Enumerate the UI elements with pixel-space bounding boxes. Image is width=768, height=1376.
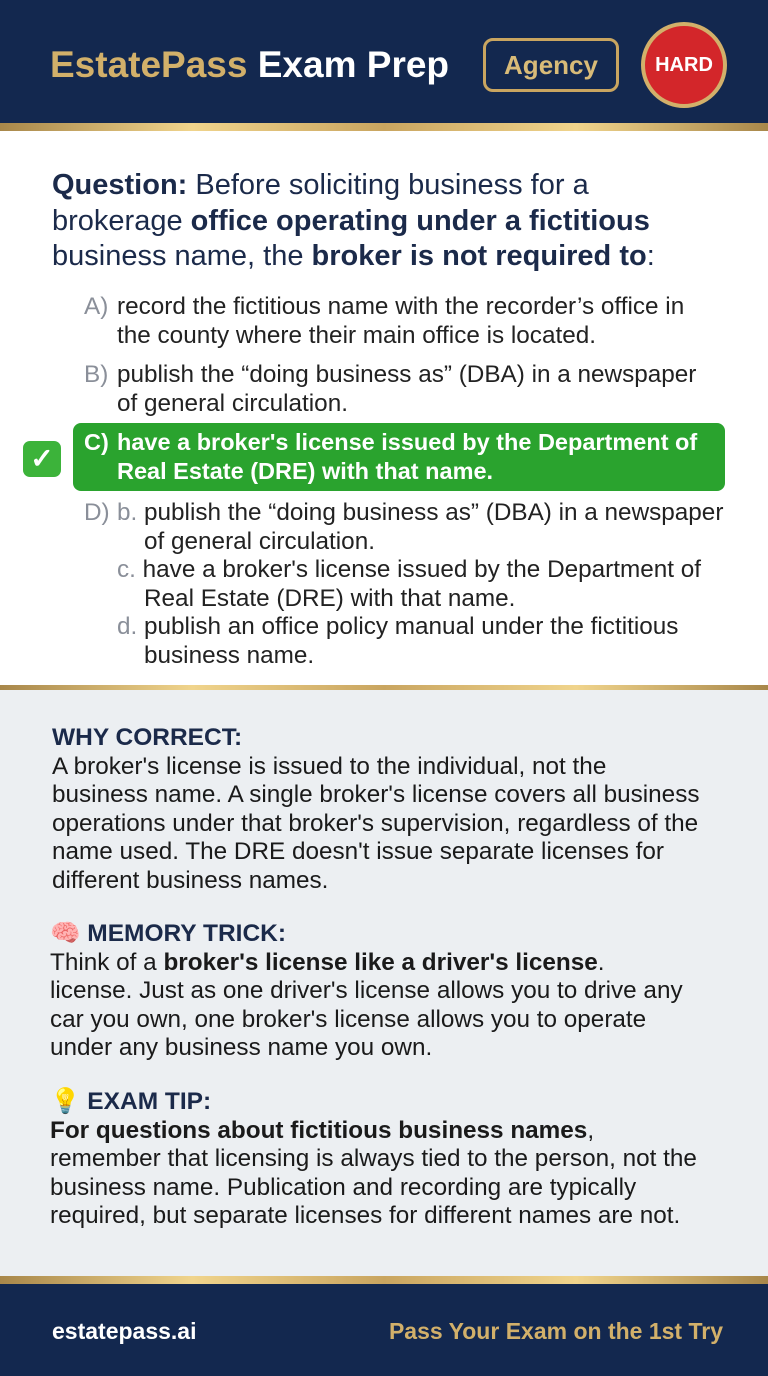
- option A: A): [84, 293, 108, 320]
- why correct: operations under that broker's supervision, regardless of the: [52, 810, 698, 836]
- option A: [84, 293, 684, 348]
- option A: record the fictitious name with the recorder’s office in: [117, 293, 684, 320]
- question: business name, the broker is not required to:: [52, 240, 655, 272]
- header: [0, 0, 768, 123]
- option D: D): [84, 499, 110, 526]
- exam tip: For questions about fictitious business names,: [50, 1116, 594, 1144]
- question: Question: Before soliciting business for a: [52, 169, 589, 201]
- option B: publish the “doing business as” (DBA) in a newspaper: [117, 361, 696, 388]
- exam tip: 💡 EXAM TIP:: [50, 1088, 211, 1115]
- exam tip: business name. Publication and recording are typically: [50, 1174, 636, 1200]
- option B: B): [84, 361, 108, 388]
- text: c. have a broker's license issued by the Department of: [117, 556, 701, 583]
- badge: HARD: [641, 22, 727, 108]
- why correct: different business names.: [52, 866, 328, 894]
- footer tagline: Pass Your Exam on the 1st Try: [389, 1318, 723, 1344]
- question: brokerage office operating under a fictitious: [52, 204, 650, 236]
- memory trick: Think of a broker's license like a driver's license.: [50, 948, 605, 976]
- exam tip: required, but separate licenses for different names are not.: [50, 1202, 680, 1229]
- badge: HARD: HARD: [655, 54, 713, 76]
- footer url: estatepass.ai: [52, 1318, 196, 1344]
- title: EstatePass Exam Prep: [50, 44, 449, 85]
- icon: check: ✓: [30, 443, 54, 474]
- option D: [84, 499, 724, 668]
- option C correct: C): [84, 429, 109, 455]
- option C correct: Real Estate (DRE) with that name.: [117, 458, 493, 484]
- memory trick: under any business name you own.: [50, 1034, 432, 1061]
- badge: Agency: [483, 38, 619, 92]
- option D: b. publish the “doing business as” (DBA) in a newspaper: [117, 499, 723, 526]
- footer: [0, 1284, 768, 1376]
- exam tip: [50, 1087, 697, 1229]
- question: [52, 169, 655, 272]
- option C correct: [73, 423, 725, 491]
- icon: check: [23, 441, 61, 477]
- memory trick: 🧠 MEMORY TRICK:: [50, 920, 286, 947]
- exam tip: remember that licensing is always tied to the person, not the: [50, 1145, 697, 1172]
- why correct: [52, 724, 700, 894]
- why correct: business name. A single broker's license covers all business: [52, 781, 700, 808]
- memory trick: car you own, one broker's license allows you to operate: [50, 1006, 646, 1032]
- text: of general circulation.: [117, 390, 348, 416]
- memory trick: [50, 920, 683, 1061]
- text: d. publish an office policy manual under the fictitious: [117, 613, 678, 640]
- text: Real Estate (DRE) with that name.: [144, 584, 515, 612]
- why correct: WHY CORRECT:: [52, 724, 242, 751]
- explanation panel: [0, 690, 768, 1276]
- badge: Agency: Agency: [504, 50, 598, 80]
- option C correct: have a broker's license issued by the Department of: [117, 429, 697, 455]
- text: business name.: [144, 642, 314, 668]
- text: the county where their main office is located.: [117, 322, 596, 348]
- why correct: name used. The DRE doesn't issue separate licenses for: [52, 838, 664, 865]
- text: of general circulation.: [144, 528, 375, 554]
- option B: [84, 361, 696, 416]
- why correct: A broker's license is issued to the individual, not the: [52, 752, 606, 780]
- memory trick: license. Just as one driver's license allows you to drive any: [50, 977, 683, 1004]
